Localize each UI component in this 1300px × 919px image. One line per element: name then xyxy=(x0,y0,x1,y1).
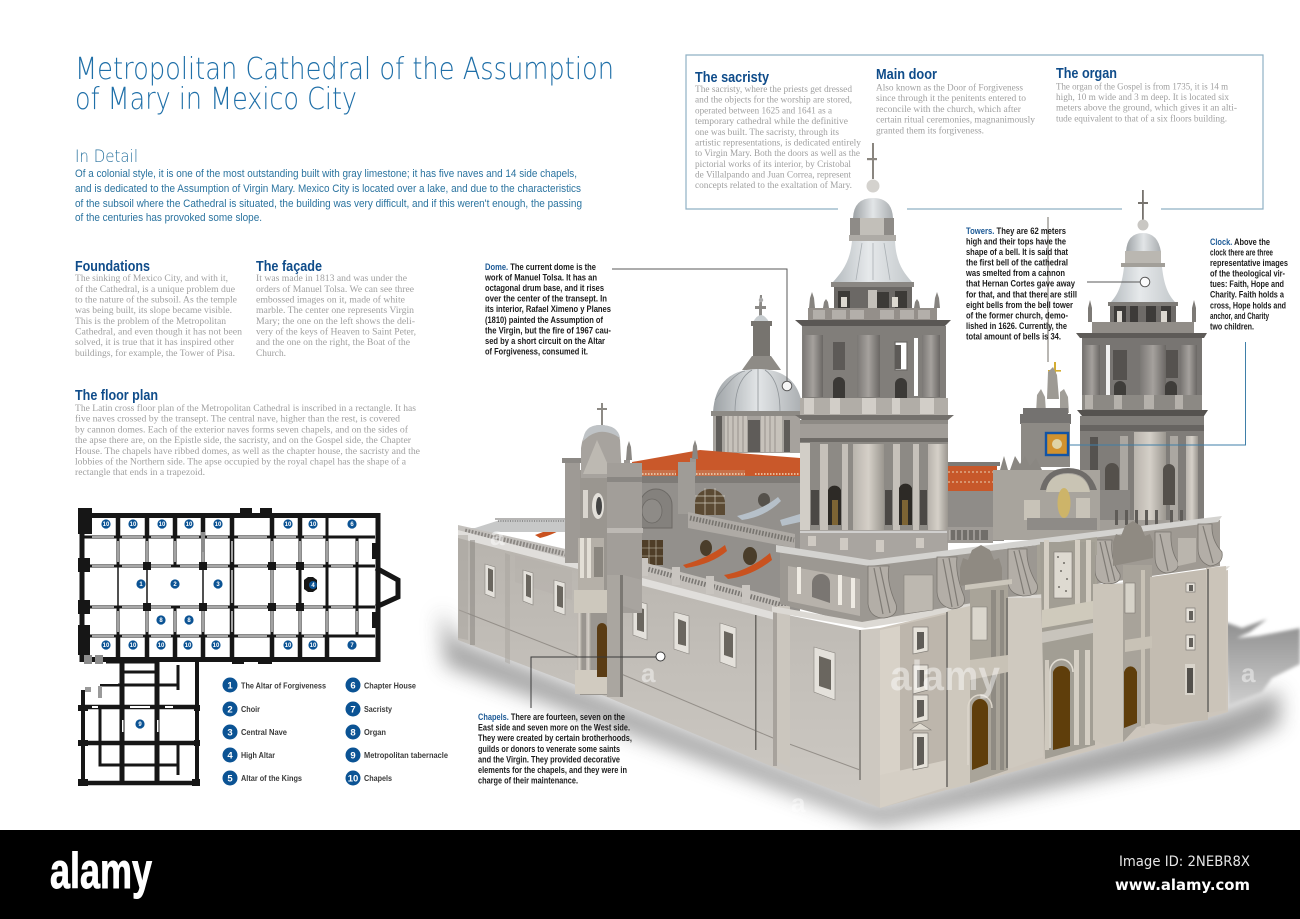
intro text block: In Detail xyxy=(75,147,138,167)
callout: dome: its interior, Rafael Ximeno y Planes xyxy=(485,304,611,314)
callout: dome xyxy=(484,262,611,356)
callout: chapels: charge of their maintenance. xyxy=(478,776,578,786)
plan number markers: 10 xyxy=(213,643,220,649)
floor plan legend: Chapter House xyxy=(364,680,416,690)
text block: the sacristy: and the objects for the worship are stored, xyxy=(695,95,852,106)
floor plan legend: 7 xyxy=(350,704,356,716)
text block: the floor plan: by cannon domes. Each of the exterior naves forms seven chapels, and on the sides of xyxy=(75,424,409,435)
floor plan diagram xyxy=(78,508,398,786)
back roof and rear wall xyxy=(620,440,1004,612)
text block: the facade: and the one on the right, the Boat of the xyxy=(256,337,411,348)
text block: the facade: It was made in 1813 and was under the xyxy=(256,273,408,284)
plan number markers: 10 xyxy=(159,522,166,528)
watermarks: a xyxy=(641,658,656,688)
plan number markers: 10 xyxy=(130,643,137,649)
plan number markers: 7 xyxy=(350,643,354,649)
text block: the floor plan: lobbies of the Northern side. The apse occupied by the royal chapel has the shape of a xyxy=(75,456,407,468)
floor plan legend: 9 xyxy=(350,750,356,762)
plan number markers: 8 xyxy=(159,618,163,624)
plan number markers: 8 xyxy=(187,618,191,624)
callout: towers: for that, and that there are still xyxy=(966,289,1077,299)
callout: dome: octagonal drum base, and it rises xyxy=(485,283,604,293)
text block: the facade: Mary; the one on the left shows the deli- xyxy=(256,316,415,327)
ground shadow xyxy=(440,610,1300,826)
text block: foundations: was being built, its slope became visible. xyxy=(75,305,232,316)
text block: the organ: The organ xyxy=(1056,65,1117,82)
callout: dome: over the center of the transept. In xyxy=(485,294,607,304)
callout: towers: lished in 1626. Currently, the xyxy=(966,321,1067,331)
floor plan legend: Central Nave xyxy=(241,727,287,737)
text block: foundations: buildings, for example, the Tower of Pisa. xyxy=(75,348,235,359)
watermarks: a xyxy=(490,521,505,551)
callout: clock: tues: Faith, Hope and xyxy=(1210,279,1284,289)
callout: dome: the Virgin, but the fire of 1967 cau- xyxy=(485,326,611,336)
text block: the sacristy: The sacristy xyxy=(695,69,770,86)
text block: main door xyxy=(876,66,1035,136)
callout: towers: total amount of bells is 34. xyxy=(966,332,1061,342)
plan number markers: 10 xyxy=(285,643,292,649)
text block: foundations: The sinking of Mexico City, and with it, xyxy=(75,273,228,284)
text block: foundations xyxy=(75,258,242,359)
plan number markers: 10 xyxy=(310,522,317,528)
callout: dome: sed by a short circuit on the Altar xyxy=(485,336,605,346)
floor plan legend: 6 xyxy=(350,680,356,692)
plan number markers xyxy=(101,519,357,729)
text block: the organ: The organ of the Gospel is from 1735, it is 14 m xyxy=(1056,82,1228,92)
text block: foundations: to the nature of the subsoil. As the temple xyxy=(75,294,238,306)
text block: foundations: of the Cathedral, is a unique problem due xyxy=(75,284,236,295)
text block: the sacristy xyxy=(695,69,861,191)
text block: foundations: solved, it is true that it has inspired other xyxy=(75,337,235,348)
panel: top info box xyxy=(686,55,1263,209)
text block: the floor plan: The floor plan xyxy=(75,387,158,404)
west wall xyxy=(458,530,880,808)
callout: chapels: and the Virgin. They provided decorative xyxy=(478,754,620,764)
text block: the floor plan: the apse there are, on the Epistle side, the sacristy, and on the Gospel side, the Chapter xyxy=(75,435,412,446)
plan number markers: 6 xyxy=(350,522,354,528)
plan number markers: 10 xyxy=(158,643,165,649)
text block: main door: Also known as the Door of Forgiveness xyxy=(876,82,1023,94)
text block: main door: reconcile with the church, which after xyxy=(876,104,1022,115)
footer logo: alamy xyxy=(50,843,152,899)
intro text block: of the centuries has provoked some slope. xyxy=(75,212,262,224)
callout: towers xyxy=(965,226,1077,342)
text block: the sacristy: one was built. The sacristy, through its xyxy=(695,127,839,138)
plan number markers: 3 xyxy=(216,582,220,588)
text block: the floor plan: five naves crossed by the transept. The central nave, higher than the rest, is covered xyxy=(75,414,400,425)
callout: chapels: elements for the chapels, and they were in xyxy=(478,765,627,775)
plan number markers: 9 xyxy=(138,722,142,728)
text block: the facade: The façade xyxy=(256,258,322,275)
footer bar xyxy=(0,830,1300,919)
plan number markers: 10 xyxy=(103,643,110,649)
text block: the facade: orders of Manuel Tolsa. We can see three xyxy=(256,284,415,295)
floor plan legend: Choir xyxy=(241,704,261,714)
callout: dome: work of Manuel Tolsa. It has an xyxy=(484,272,597,282)
callout: dome: of Forgiveness, consumed it. xyxy=(485,346,588,356)
text block: the organ xyxy=(1056,65,1237,124)
callout: towers: was smelted from a cannon xyxy=(965,268,1065,278)
callout: towers: the first bell of the cathedral xyxy=(966,258,1068,268)
callout: chapels: Chapels. There are fourteen, seven on the xyxy=(478,712,625,722)
text block: the facade xyxy=(256,258,416,359)
callout: clock: anchor, and Charity xyxy=(1210,311,1269,321)
callout: clock leader xyxy=(1069,342,1246,445)
plan number markers: 1 xyxy=(139,582,143,588)
text block: the sacristy: temporary cathedral while the definitive xyxy=(695,116,849,127)
intro text block: Of a colonial style, it is one of the most outstanding built with gray limestone; it has five naves and 14 side chapels, xyxy=(75,168,577,180)
intro text block xyxy=(75,147,582,224)
side portal xyxy=(562,403,643,697)
text block: main door: granted them its forgiveness. xyxy=(876,125,984,136)
callout: chapels xyxy=(478,712,632,786)
text block: the sacristy: concepts related to the exaltation of Mary. xyxy=(695,180,852,191)
footer url: www.alamy.com xyxy=(1115,876,1250,894)
title: of Mary in Mexico City xyxy=(75,82,357,117)
image id: Image ID: 2NEBR8X xyxy=(1119,854,1250,870)
upper storey with volutes xyxy=(772,516,1230,628)
text block: the facade: Church. xyxy=(256,348,286,359)
floor plan legend: 4 xyxy=(227,750,233,762)
callout: dome: Dome. The current dome is the xyxy=(485,262,596,272)
watermarks: a xyxy=(1241,658,1256,688)
plan number markers: 2 xyxy=(173,582,177,588)
floor plan legend: High Altar xyxy=(241,750,276,760)
callout: clock: of the theological vir- xyxy=(1210,269,1285,279)
right tower xyxy=(1076,190,1208,522)
floor plan legend: Chapels xyxy=(364,773,392,783)
text block: the sacristy: pictorial works of its interior, by Cristobal xyxy=(695,159,851,170)
callout: clock xyxy=(1210,237,1288,331)
plan number markers: 10 xyxy=(310,643,317,649)
plan number markers: 10 xyxy=(185,643,192,649)
callout: towers: Towers. They are 62 meters xyxy=(966,226,1066,236)
volutes xyxy=(868,524,1222,618)
callout: clock: Clock. Above the xyxy=(1210,237,1270,247)
text block: the facade: embossed images on it, made of white xyxy=(256,294,406,306)
text block: foundations: Foundations xyxy=(75,258,150,275)
title xyxy=(75,52,614,117)
text block: the sacristy: The sacristy, where the priests get dressed xyxy=(695,84,852,95)
floor plan legend: 2 xyxy=(227,704,233,716)
floor plan legend: Organ xyxy=(364,727,386,737)
plan number markers: 10 xyxy=(186,522,193,528)
callout: clock: two children. xyxy=(1210,321,1254,331)
plan number markers: 10 xyxy=(103,522,110,528)
text block: the organ: meters above the ground, which gives it an alti- xyxy=(1056,103,1237,114)
callout: towers: that Hernan Cortes gave away xyxy=(966,279,1075,289)
floor plan legend: 1 xyxy=(227,680,233,692)
back dome xyxy=(711,295,803,453)
rear wall openings xyxy=(640,462,800,565)
plan number markers: 10 xyxy=(285,522,292,528)
front facade xyxy=(880,540,1228,808)
text block: foundations: Cathedral, and even though it has not been xyxy=(75,326,242,338)
text block: the floor plan: House. The chapels have ribbed domes, as well as the chapter house, the sacristy and the xyxy=(75,446,421,457)
text block: main door: since through it the penitents entered to xyxy=(876,93,1026,104)
text block: the floor plan: The Latin cross floor plan of the Metropolitan Cathedral is inscribed in a rectangle. It has xyxy=(75,403,416,414)
callout: clock: Charity. Faith holds a xyxy=(1210,290,1284,300)
floor plan legend: 3 xyxy=(227,728,233,738)
watermarks xyxy=(490,521,1256,818)
floor plan legend: 10 xyxy=(348,774,358,784)
callout: chapels: They were created by certain brotherhoods, xyxy=(478,733,632,743)
text block: the sacristy: operated between 1625 and 1641 as a xyxy=(695,105,833,116)
illustration: cathedral xyxy=(458,143,1256,818)
text block: the facade: very of the keys of Heaven to Saint Peter, xyxy=(256,326,416,338)
intro text block: of the subsoil where the Cathedral is situated, the building was very difficult, and if this weren't enough, the passing xyxy=(75,198,582,210)
ornaments xyxy=(904,575,933,614)
callout: dome leader xyxy=(612,269,792,391)
watermarks: a xyxy=(791,788,806,818)
floor plan legend: 8 xyxy=(350,728,356,738)
text block: the sacristy: to Virgin Mary. Both the doors as well as the xyxy=(695,148,861,159)
center pediment and pole xyxy=(947,217,1203,543)
left tower xyxy=(795,143,954,562)
callout: towers: eight bells from the bell tower xyxy=(966,300,1073,310)
text block: the sacristy: de Villalpando and Juan Correa, represent xyxy=(695,170,851,180)
text block: the facade: marble. The center one represents Virgin xyxy=(256,305,414,316)
orange vaults xyxy=(535,520,772,579)
plan number markers: 10 xyxy=(130,522,137,528)
callout: clock: clock there are three xyxy=(1210,248,1273,258)
floor plan legend: Sacristy xyxy=(364,704,392,714)
callout: chapels leader xyxy=(531,652,665,708)
intro text block: and is dedicated to the Assumption of Virgin Mary. Mexico City is located over a lake, and due to the characteristics xyxy=(75,183,581,195)
callout: towers: high and their tops have the xyxy=(966,236,1066,246)
floor plan legend: The Altar of Forgiveness xyxy=(241,680,326,690)
text block: the floor plan xyxy=(75,387,421,478)
floor plan legend: Altar of the Kings xyxy=(241,773,302,783)
text block: the floor plan: rectangle that ends in a trapezoid. xyxy=(75,467,205,478)
callout: dome: (1810) painted the Assumption of xyxy=(485,315,603,325)
left wing parapet xyxy=(458,519,787,617)
text block: the organ: high, 10 m wide and 3 m deep. It is located six xyxy=(1056,92,1229,103)
floor plan legend: 5 xyxy=(227,774,233,784)
text block: main door: certain ritual ceremonies, magnanimously xyxy=(876,115,1035,126)
plan number markers: 4 xyxy=(311,583,315,589)
callout: towers leader xyxy=(1087,277,1150,287)
callout: chapels: guilds or donors to venerate some saints xyxy=(478,744,620,754)
callout: towers: of the former church, demo- xyxy=(966,310,1068,320)
title: Metropolitan Cathedral of the Assumption xyxy=(75,52,614,87)
text block: foundations: This is the problem of the Metropolitan xyxy=(75,316,226,327)
text block: main door: Main door xyxy=(876,66,937,83)
floor plan legend: Metropolitan tabernacle xyxy=(364,750,448,760)
callout: chapels: East side and seven more on the West side. xyxy=(478,723,630,733)
text block: the organ: tude equivalent to that of a six floors building. xyxy=(1056,114,1227,124)
text block: the sacristy: artistic representations, is dedicated entirely xyxy=(695,138,861,148)
callout: towers: shape of a bell. It is said that xyxy=(966,247,1068,257)
floor plan legend xyxy=(222,678,448,786)
watermarks: alamy xyxy=(890,652,1001,699)
plan number markers: 10 xyxy=(215,522,222,528)
